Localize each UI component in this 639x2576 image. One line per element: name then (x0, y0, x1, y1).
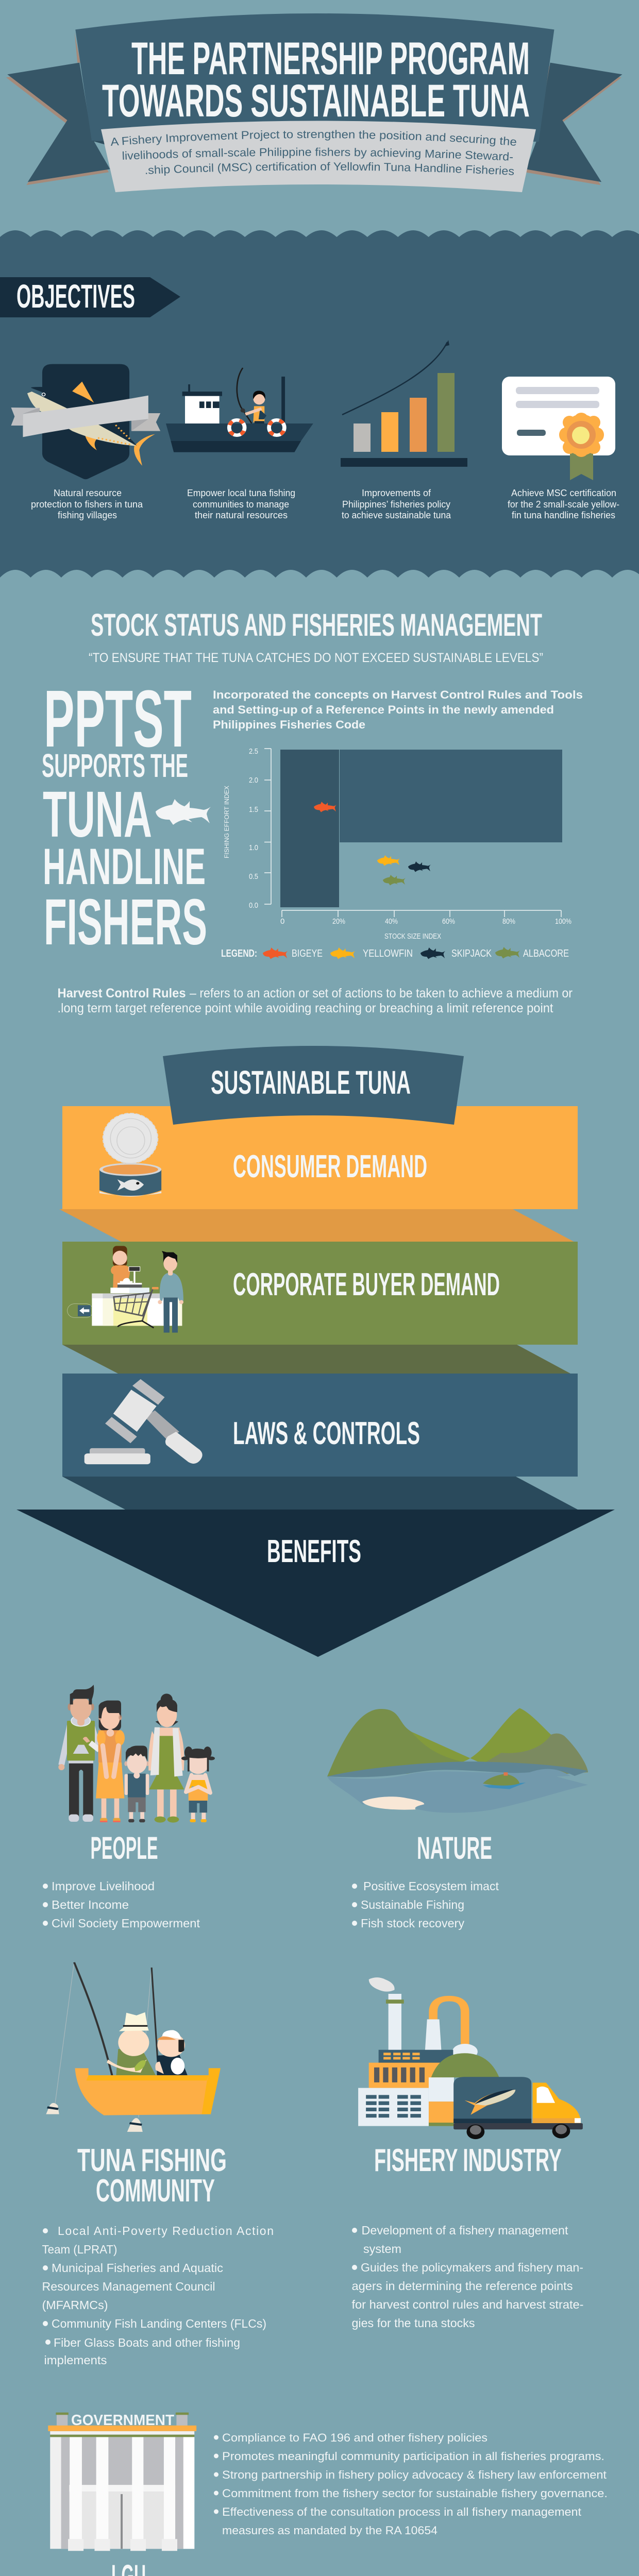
icon: gavel (85, 1379, 203, 1464)
figure: woman (148, 1693, 184, 1823)
band: corporate buyer demand (62, 1242, 578, 1374)
panel: objectives background (0, 230, 639, 578)
icon: cashier and shopper (68, 1246, 183, 1333)
heading: people: PEOPLE (91, 1831, 158, 1866)
band: consumer demand: CONSUMER DEMAND (233, 1149, 427, 1184)
list: community benefits: Fiber Glass Boats and other fishing (54, 2336, 240, 2349)
chart: stock status: 60% (442, 917, 455, 926)
chart: stock status: 100% (555, 917, 571, 926)
list: people benefits: Better Income (52, 1898, 129, 1911)
icon: certificate (502, 377, 615, 480)
list: industry benefits: Guides the policymakers and fishery man- (361, 2261, 583, 2274)
headline: PPTST supports the tuna handline fishers (42, 674, 211, 958)
list: community benefits: Local Anti-Poverty Reduction Action (58, 2224, 274, 2238)
chart: stock status: 2.0 (249, 776, 258, 785)
objective captions: Empower local tuna fishing (187, 488, 295, 498)
objective captions: Philippines’ fisheries policy (342, 499, 450, 510)
list: community benefits (42, 2224, 274, 2367)
chart: stock status: 1.0 (249, 843, 258, 852)
chart: stock status (223, 747, 571, 941)
objective captions: fin tuna handline fisheries (512, 510, 615, 520)
objective captions: fishing villages (58, 510, 117, 520)
list: LGU benefits: Effectiveness of the consultation process in all fishery management (222, 2505, 581, 2518)
list: LGU benefits: Promotes meaningful community participation in all fisheries programs. (222, 2450, 604, 2463)
chart marker: bigeye (314, 802, 337, 812)
chart: stock status: 0 (280, 917, 284, 926)
heading: objectives: OBJECTIVES (16, 278, 135, 315)
chart: stock status: 1.5 (249, 805, 258, 814)
figure: mother (96, 1701, 125, 1822)
figure: father (58, 1685, 102, 1822)
subtitle panel: .ship Council (MSC) certification of Yellowfin Tuna Handline Fisheries (146, 162, 514, 176)
chart: stock status: STOCK SIZE INDEX (384, 932, 441, 941)
text block: harvest control rules definition (58, 986, 573, 1015)
figure: girl (181, 1747, 215, 1822)
figure: boy (124, 1745, 149, 1822)
text block: harvest control concepts: Philippines Fisheries Code (213, 718, 365, 731)
text block: harvest control concepts: Incorporated the concepts on Harvest Control Rules and Tools (213, 688, 583, 701)
headline: PPTST supports the tuna handline fishers: SUPPORTS THE (42, 747, 188, 784)
band: laws and controls: LAWS & CONTROLS (233, 1416, 420, 1451)
panel: header ribbon (6, 13, 623, 192)
list: LGU benefits: Commitment from the fishery sector for sustainable fishery governance. (222, 2487, 608, 2500)
list: community benefits: Team (LPRAT) (42, 2243, 117, 2256)
headline: PPTST supports the tuna handline fishers: HANDLINE (43, 838, 206, 895)
heading: benefits: BENEFITS (267, 1534, 361, 1569)
heading banner: sustainable tuna: SUSTAINABLE TUNA (211, 1064, 411, 1101)
list: LGU benefits: measures as mandated by the RA 10654 (222, 2524, 438, 2537)
heading: objectives (0, 277, 180, 317)
list: industry benefits: Development of a fishery management (362, 2224, 568, 2237)
text block: harvest control rules definition: Harvest Control Rules (58, 986, 186, 1001)
list: community benefits: Resources Management Council (42, 2280, 215, 2293)
icon: fishermen in boat (46, 1962, 221, 2132)
chart legend: BIGEYE (292, 948, 323, 959)
heading: tuna fishing community: TUNA FISHING (77, 2143, 227, 2178)
heading: benefits (16, 1510, 615, 1657)
list: community benefits: implements (44, 2353, 107, 2367)
icon: nature island (327, 1708, 588, 1813)
heading banner: sustainable tuna (163, 1046, 464, 1125)
list: nature benefits (352, 1879, 499, 1930)
objective captions: to achieve sustainable tuna (342, 510, 451, 520)
list: industry benefits: system (363, 2242, 401, 2256)
chart legend: LEGEND: (221, 948, 257, 959)
icon: government building (48, 2412, 196, 2551)
chart: stock status: 40% (385, 917, 398, 926)
objective captions: Improvements of (362, 488, 431, 498)
list: industry benefits: gies for the tuna stocks (351, 2316, 475, 2330)
bar chart icon (341, 340, 467, 467)
text block: harvest control concepts (213, 688, 583, 731)
chart: stock status: FISHING EFFORT INDEX (223, 786, 230, 858)
list: LGU benefits (214, 2431, 608, 2537)
list: community benefits: (MFARMCs) (42, 2298, 108, 2312)
chart marker: yellowfin (377, 855, 400, 866)
text block: harvest control concepts: and Setting-up of a Reference Points in the newly amended (213, 703, 554, 716)
list: community benefits: Municipal Fisheries and Aquatic (52, 2261, 223, 2275)
heading: tuna fishing community (77, 2143, 227, 2209)
text block: harvest control rules definition: .long term target reference point while avoiding reaching or breaching a limit reference point (58, 1001, 553, 1015)
objective captions: Natural resource (54, 488, 122, 498)
title (102, 32, 530, 126)
list: nature benefits: Positive Ecosystem imact (363, 1879, 499, 1893)
headline: PPTST supports the tuna handline fishers: PPTST (44, 674, 192, 764)
chart: stock status: 0.5 (249, 872, 258, 881)
list: industry benefits: for harvest control rules and harvest strate- (351, 2298, 583, 2311)
icon: tuna on shield with ribbon (11, 364, 160, 479)
text block: harvest control rules definition: – refers to an action or set of actions to be taken to achieve a medium or (190, 986, 573, 1001)
heading: nature: NATURE (417, 1831, 492, 1866)
chart: stock status: 0.0 (249, 901, 258, 910)
list: industry benefits (351, 2224, 583, 2330)
band: laws and controls (62, 1374, 578, 1510)
icon: white tuna (156, 799, 211, 825)
objective captions: protection to fishers in tuna (31, 499, 143, 510)
scallop edge (0, 570, 639, 585)
chart legend: SKIPJACK (451, 948, 492, 959)
subtitle panel (101, 121, 536, 192)
objective captions: communities to manage (193, 499, 289, 510)
list: people benefits (43, 1879, 200, 1930)
objective captions: their natural resources (195, 510, 288, 520)
chart: stock status: 80% (502, 917, 515, 926)
list: LGU benefits: Strong partnership in fishery policy advocacy & fishery law enforcement (222, 2468, 607, 2481)
icon: government building: GOVERNMENT (71, 2412, 174, 2429)
list: nature benefits: Fish stock recovery (361, 1917, 465, 1930)
subtitle panel: A Fishery Improvement Project to strengthen the position and securing the (111, 130, 516, 146)
icon: fishing boat (166, 368, 313, 452)
icon: factory and truck (358, 1977, 583, 2139)
headline: PPTST supports the tuna handline fishers: TUNA (43, 778, 152, 851)
chart marker: albacore (383, 875, 406, 885)
list: industry benefits: agers in determining the reference points (351, 2279, 573, 2293)
icon: family (58, 1685, 215, 1823)
objective captions: for the 2 small-scale yellow- (508, 499, 619, 510)
chart: stock status: 2.5 (249, 747, 258, 756)
chart: stock status: 20% (332, 917, 345, 926)
icon: tuna can (99, 1113, 161, 1196)
quote: “TO ENSURE THAT THE TUNA CATCHES DO NOT EXCEED SUSTAINABLE LEVELS” (89, 651, 543, 665)
list: LGU benefits: Compliance to FAO 196 and other fishery policies (222, 2431, 487, 2444)
chart marker: skipjack (408, 861, 431, 872)
list: people benefits: Civil Society Empowerment (52, 1917, 200, 1930)
heading: tuna fishing community: COMMUNITY (96, 2173, 215, 2209)
subtitle panel: livelihoods of small-scale Philippine fishers by achieving Marine Steward- (123, 147, 513, 161)
objective captions: Achieve MSC certification (511, 488, 616, 498)
panel: sustainable tuna stack (59, 1106, 578, 1510)
list: people benefits: Improve Livelihood (52, 1879, 155, 1893)
chart legend: ALBACORE (523, 948, 569, 959)
list: community benefits: Community Fish Landing Centers (FLCs) (52, 2317, 266, 2330)
list: nature benefits: Sustainable Fishing (361, 1898, 464, 1911)
chart legend (221, 947, 569, 959)
objective captions (31, 488, 619, 520)
headline: PPTST supports the tuna handline fishers: FISHERS (44, 886, 207, 958)
chart legend: YELLOWFIN (363, 948, 413, 959)
band: consumer demand (59, 1106, 578, 1242)
